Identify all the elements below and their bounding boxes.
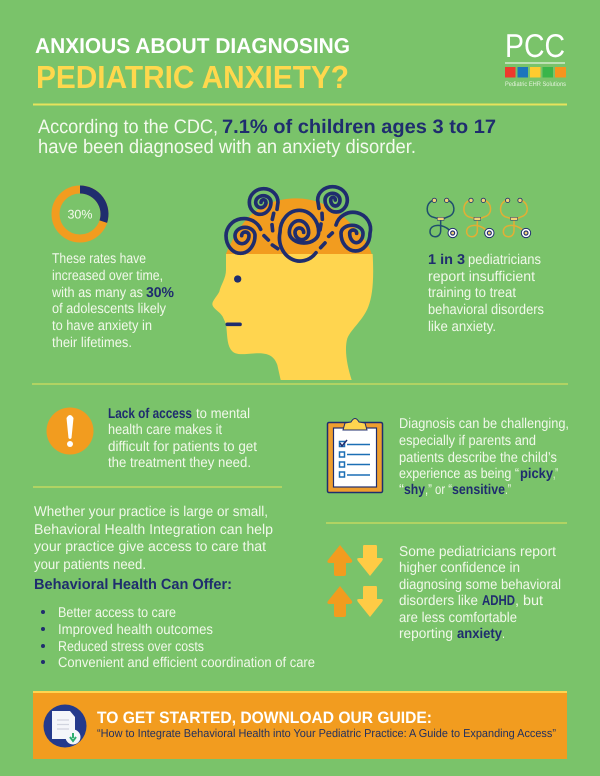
text block: 1 in 3 pediatricians: pediatricians — [468, 252, 541, 268]
banner: download guide: TO GET STARTED, DOWNLOAD OUR GUIDE: — [97, 709, 432, 727]
text block: diagnosis can be challenging — [399, 416, 569, 498]
text block: pediatrician confidence: disorders like — [399, 593, 478, 609]
donut chart: 30%: 30% — [67, 208, 93, 222]
logo: PCC: Pediatric EHR Solutions — [505, 81, 567, 88]
text block: rates over time: increased over time, — [52, 268, 163, 284]
text block: diagnosis can be challenging: “ — [399, 482, 404, 498]
text block: behavioral health integration: Whether your practice is large or small, — [34, 504, 268, 520]
bullet list: Reduced stress over costs — [58, 639, 204, 655]
text block: diagnosis can be challenging: patients describe the child’s — [399, 450, 557, 466]
text block: rates over time: with as many as — [51, 285, 143, 301]
text block: 1 in 3 pediatricians: training to treat — [428, 285, 516, 301]
bullet list: Improved health outcomes — [58, 622, 213, 638]
icon: gold stethoscope — [464, 198, 494, 238]
intro statement: 7.1% of children ages 3 to 17 — [222, 116, 496, 138]
text block: rates over time: to have anxiety in — [52, 318, 152, 334]
text block: 1 in 3 pediatricians: 1 in 3 — [428, 252, 465, 268]
text block: pediatrician confidence: anxiety — [457, 626, 502, 642]
illustration: head with spirals — [212, 187, 373, 380]
donut chart: 30% — [56, 189, 105, 238]
bullet list: Convenient and efficient coordination of care — [58, 655, 315, 671]
title: PEDIATRIC ANXIETY? — [36, 59, 349, 95]
text block: behavioral health integration — [34, 504, 273, 573]
logo: PCC: PCC — [505, 27, 565, 64]
logo: PCC — [505, 27, 567, 88]
text block: diagnosis can be challenging: shy — [404, 482, 425, 498]
icon: clipboard — [328, 418, 382, 492]
icon: document download — [44, 704, 86, 748]
text block: diagnosis can be challenging: Diagnosis can be challenging, — [399, 416, 569, 432]
text block: lack of access: to mental — [196, 406, 250, 422]
intro statement — [38, 116, 496, 158]
text block: pediatrician confidence: reporting — [399, 626, 453, 642]
icon: gold stethoscope — [501, 198, 531, 238]
text block: pediatrician confidence: , but — [515, 593, 543, 609]
text block: pediatrician confidence — [399, 544, 561, 642]
text block: lack of access: health care makes it — [108, 422, 222, 438]
text block: rates over time: their lifetimes. — [52, 335, 132, 351]
text block: pediatrician confidence: are less comfortable — [399, 610, 517, 626]
text block: diagnosis can be challenging: .” — [505, 482, 511, 498]
text block: pediatrician confidence: ADHD — [482, 593, 515, 609]
text block: behavioral health integration: Behavioral Health Integration can help — [34, 522, 273, 538]
text block: 1 in 3 pediatricians — [428, 252, 544, 335]
text block: pediatrician confidence: higher confidence in — [399, 560, 520, 576]
icon: exclamation mark — [46, 408, 94, 454]
text block: 1 in 3 pediatricians: like anxiety. — [428, 319, 496, 335]
text block: pediatrician confidence: diagnosing some behavioral — [399, 577, 561, 593]
banner: download guide: “How to Integrate Behavioral Health into Your Pediatric Practice: A Guide to Expanding Access” — [97, 728, 556, 740]
heading: behavioral health can offer: Behavioral Health Can Offer: — [34, 577, 232, 593]
bullet list: Better access to care — [58, 605, 176, 621]
text block: rates over time — [51, 251, 174, 351]
text block: 1 in 3 pediatricians: behavioral disorders — [428, 302, 544, 318]
text block: behavioral health integration: your practice give access to care that — [34, 539, 266, 555]
icon: up and down arrows — [327, 545, 383, 617]
text block: lack of access — [108, 406, 257, 471]
bullet list — [41, 605, 315, 671]
text block: pediatrician confidence: . — [502, 626, 505, 642]
text block: diagnosis can be challenging: ,” — [553, 466, 558, 482]
text block: diagnosis can be challenging: sensitive — [452, 482, 505, 498]
banner: download guide — [33, 691, 567, 759]
text block: rates over time: 30% — [146, 285, 174, 301]
intro statement: According to the CDC, — [38, 116, 218, 138]
text block: lack of access: the treatment they need. — [108, 455, 251, 471]
text block: 1 in 3 pediatricians: report insufficient — [428, 269, 535, 285]
text block: diagnosis can be challenging: picky — [520, 466, 553, 482]
icon: navy stethoscope — [427, 198, 457, 238]
text block: pediatrician confidence: Some pediatricians report — [399, 544, 556, 560]
title — [35, 34, 350, 95]
text block: lack of access: difficult for patients to get — [108, 439, 257, 455]
text block: rates over time: These rates have — [52, 251, 146, 267]
intro statement: have been diagnosed with an anxiety disorder. — [38, 136, 416, 158]
text block: diagnosis can be challenging: especially if parents and — [399, 433, 536, 449]
text block: behavioral health integration: your patients need. — [34, 557, 146, 573]
text block: diagnosis can be challenging: experience as being “ — [399, 466, 519, 482]
icon: three stethoscopes — [427, 198, 531, 238]
text block: rates over time: of adolescents likely — [52, 301, 167, 317]
text block: lack of access: Lack of access — [108, 406, 192, 422]
title: ANXIOUS ABOUT DIAGNOSING — [35, 34, 350, 58]
text block: diagnosis can be challenging: ,” or “ — [425, 482, 452, 498]
